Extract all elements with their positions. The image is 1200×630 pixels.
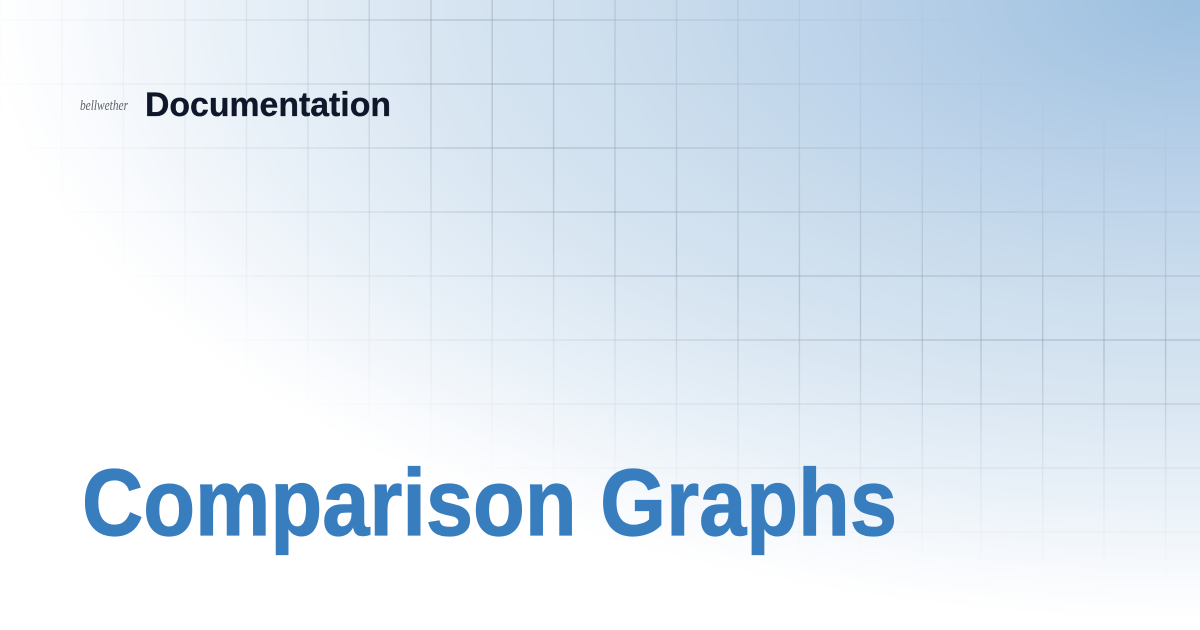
title: Comparison Graphs: Comparison Graphs: [82, 450, 897, 556]
logo wordmark: bellwether: bellwether: [80, 98, 128, 114]
heading: Documentation: Documentation: [145, 86, 391, 124]
